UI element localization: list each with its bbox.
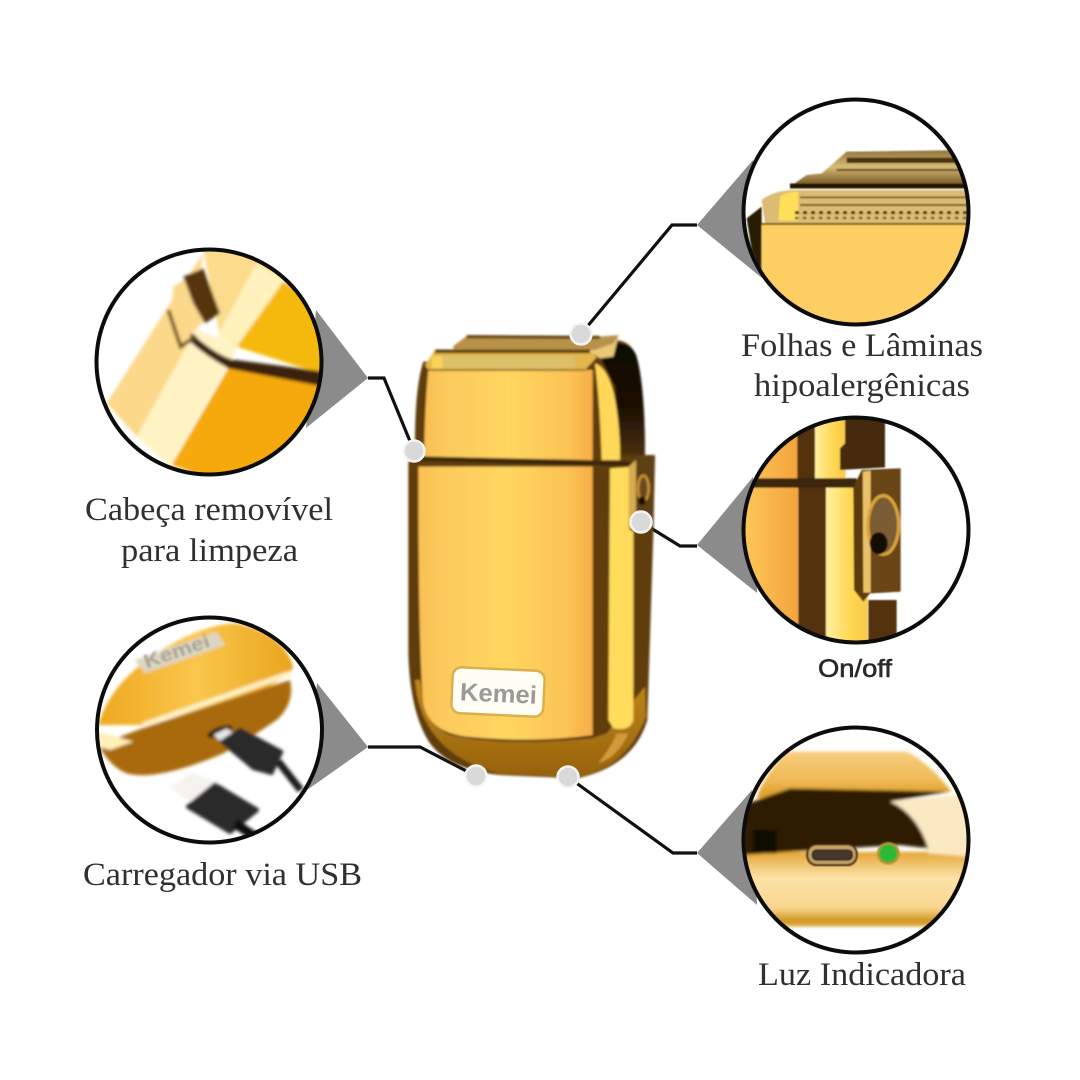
label: foils and blades [741, 328, 983, 404]
shaver upper side highlight [595, 363, 620, 460]
inset image: port and LED [743, 752, 970, 927]
inset logo text: Kemei [141, 631, 213, 673]
label: foils and blades: hipoalergênicas [754, 368, 970, 404]
front foil [425, 350, 597, 370]
Kemei logo badge [451, 667, 545, 717]
callout: USB charger [97, 618, 368, 842]
rear foil [453, 335, 618, 351]
inset image: switch [746, 420, 902, 640]
seam line [410, 458, 633, 464]
USB-C port [807, 844, 857, 865]
shaver rear dark panel [600, 343, 645, 455]
label: removable head [85, 492, 333, 569]
shaver front face lower [418, 467, 593, 740]
label: removable head: Cabeça removível [85, 492, 333, 528]
shaver side highlight [608, 467, 633, 729]
shaver body silhouette [408, 340, 655, 778]
power switch bracket [629, 455, 655, 533]
inset image: head seam [107, 250, 330, 483]
shaver lower corner highlight [598, 733, 628, 763]
callout: indicator light [697, 728, 970, 952]
foil side tabs [590, 337, 618, 358]
callout: foils and blades [697, 100, 973, 330]
label: foils and blades: Folhas e Lâminas [741, 328, 983, 364]
label: indicator light: Luz Indicadora [758, 957, 966, 993]
shaver product illustration [408, 335, 655, 778]
connector lines [368, 225, 697, 853]
label: on/off: On/off [818, 655, 892, 683]
green LED [877, 842, 900, 865]
inset image: USB cable [98, 623, 301, 840]
label: USB charger: Carregador via USB [83, 857, 362, 893]
label: removable head: para limpeza [121, 533, 298, 569]
Kemei logo badge: Kemei [459, 678, 538, 710]
connector dots [404, 324, 652, 788]
shaver front face upper [424, 370, 593, 460]
callout: removable head [96, 250, 368, 483]
callout: on/off switch [697, 410, 968, 650]
inset image: foils [747, 150, 973, 330]
shaver bottom band [415, 680, 646, 777]
